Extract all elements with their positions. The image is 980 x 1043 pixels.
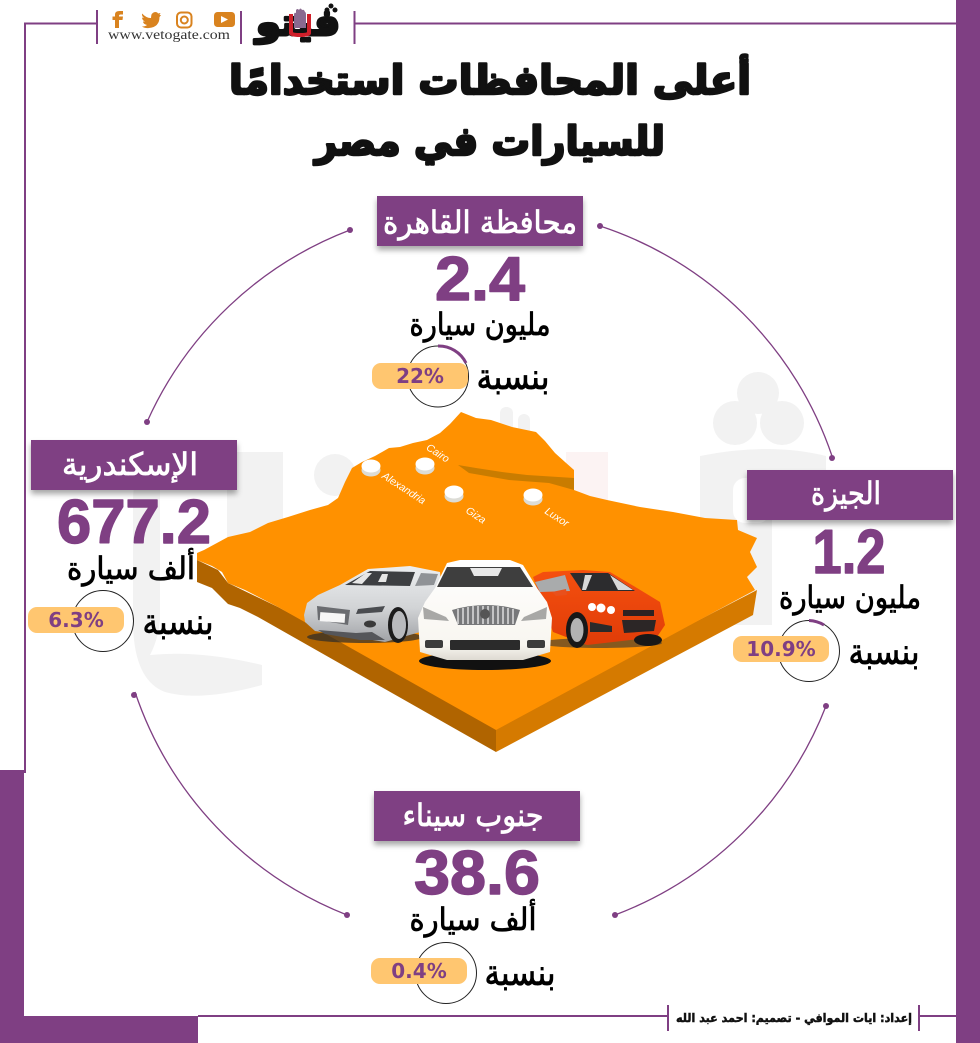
map inlet shading xyxy=(458,465,574,490)
percentage gauge xyxy=(733,620,840,682)
header social icons and website xyxy=(108,11,235,43)
share label: بنسبة xyxy=(142,602,214,643)
unit: ألف سيارة xyxy=(67,548,195,587)
percentage gauge xyxy=(371,942,476,1004)
heading xyxy=(31,440,237,490)
map side left xyxy=(197,553,496,752)
panel: South Sinai xyxy=(371,791,580,1004)
heading xyxy=(374,791,580,841)
unit: مليون سيارة xyxy=(779,580,921,616)
share label: بنسبة xyxy=(848,632,920,673)
map city markers: Alexandria xyxy=(379,469,428,507)
percentage gauge: 0.4% xyxy=(391,959,447,983)
map city markers xyxy=(362,442,571,530)
heading: الجيزة xyxy=(811,476,881,512)
title xyxy=(229,54,751,165)
percentage gauge: 10.9% xyxy=(746,637,816,661)
percentage gauge xyxy=(28,590,134,652)
panel: Cairo xyxy=(372,196,583,407)
percentage gauge: 22% xyxy=(396,364,444,388)
icon: twitter xyxy=(142,12,161,28)
icon: facebook xyxy=(112,11,123,28)
heading xyxy=(377,196,583,246)
panel: Alexandria xyxy=(28,440,237,652)
number: 2.4 xyxy=(435,245,526,314)
percentage gauge: 6.3% xyxy=(48,608,104,632)
number: 1.2 xyxy=(812,518,886,587)
percentage gauge xyxy=(372,346,468,407)
panel: Giza xyxy=(733,470,953,682)
heading: محافظة القاهرة xyxy=(383,205,577,241)
map city markers: Luxor xyxy=(542,505,571,530)
car: silver xyxy=(304,566,445,643)
unit: ألف سيارة xyxy=(410,899,536,938)
heading: الإسكندرية xyxy=(62,447,198,483)
connector arcs xyxy=(131,223,835,918)
map side right xyxy=(496,590,757,752)
map top surface xyxy=(197,412,757,730)
icon: youtube xyxy=(214,12,235,27)
icon: instagram xyxy=(177,12,192,28)
title: أعلى المحافظات استخدامًا xyxy=(229,54,751,104)
number: 38.6 xyxy=(414,839,540,908)
credits: إعداد: ايات الموافي - تصميم: احمد عبد الله xyxy=(676,1011,912,1026)
car: red xyxy=(533,570,665,648)
heading xyxy=(747,470,953,520)
map city markers: Cairo xyxy=(424,442,452,465)
share label: بنسبة xyxy=(476,357,550,398)
cars xyxy=(304,560,665,670)
number: 677.2 xyxy=(57,488,211,557)
background watermark logo xyxy=(133,372,826,696)
unit: مليون سيارة xyxy=(410,307,550,343)
website url: www.vetogate.com xyxy=(108,28,230,43)
car: white xyxy=(418,560,552,670)
map of Egypt xyxy=(197,412,757,752)
title: للسيارات في مصر xyxy=(313,119,665,165)
share label: بنسبة xyxy=(484,953,556,994)
map city markers: Giza xyxy=(463,505,488,526)
logo: فيتو xyxy=(254,3,340,44)
heading: جنوب سيناء xyxy=(402,798,544,834)
